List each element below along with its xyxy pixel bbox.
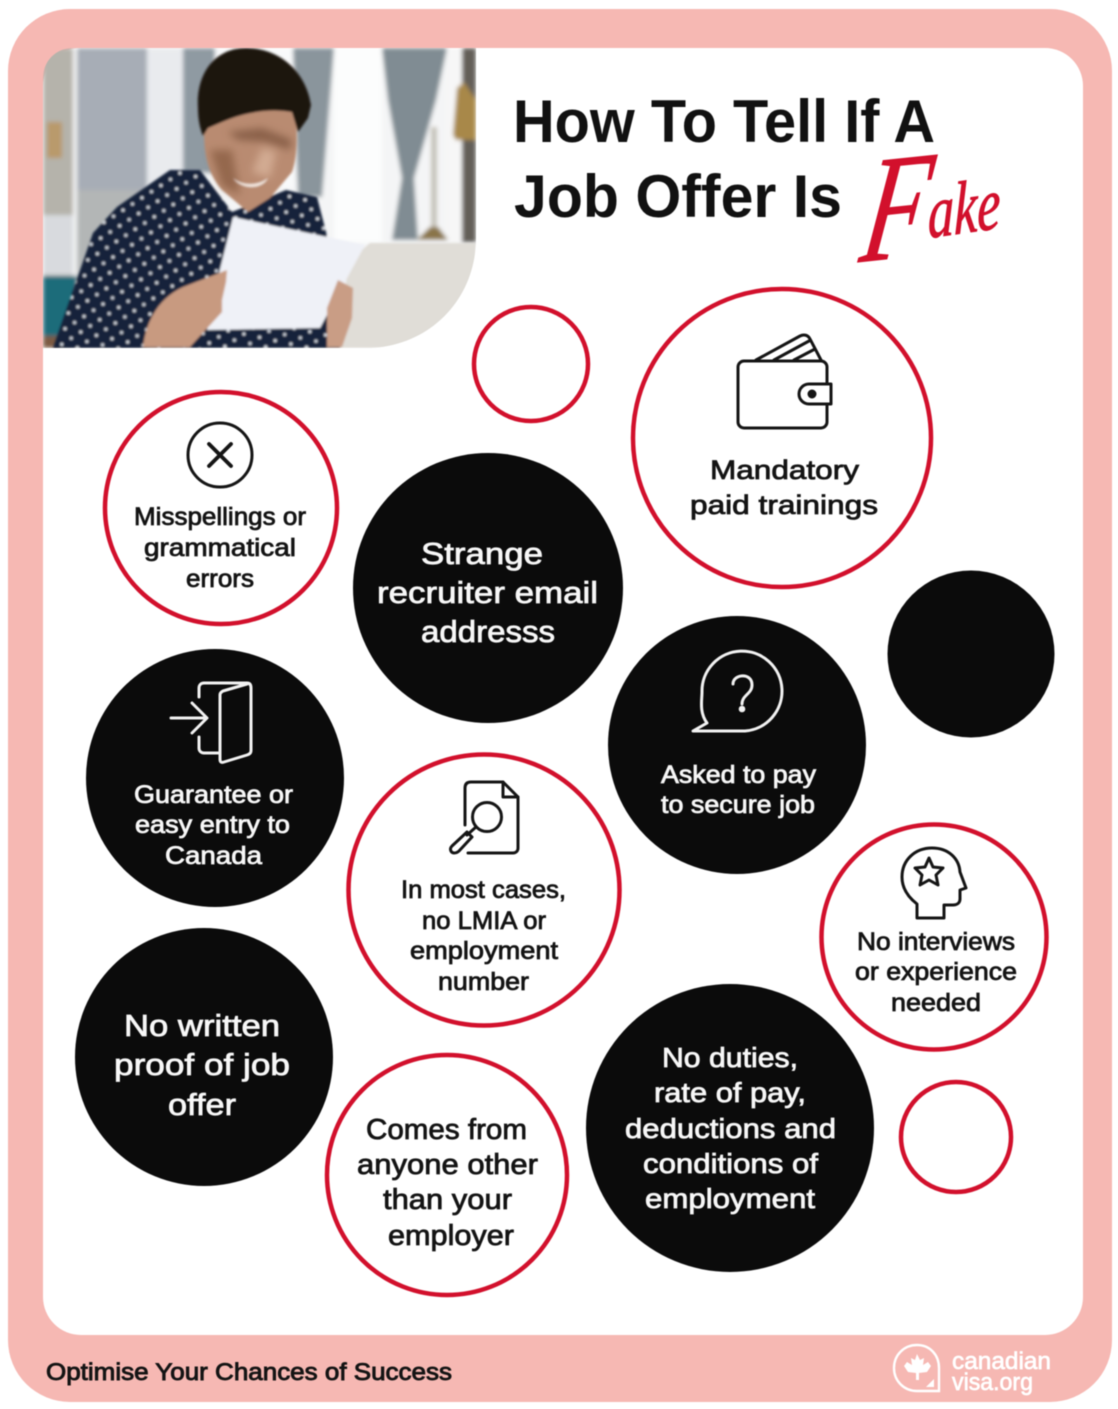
item: No duties, rate of pay, deductions and conditions xyxy=(586,984,874,1272)
item: no LMIA or employment number: employment xyxy=(410,937,558,965)
item: Asked to pay to secure job: Asked to pay xyxy=(661,761,817,789)
title: How To Tell If A xyxy=(513,88,935,155)
icon: document with magnifier xyxy=(451,782,518,853)
item: Misspellings or grammatical errors: errors xyxy=(186,565,254,593)
footer logo: canadianvisa.org: canadian xyxy=(952,1348,1051,1375)
item: No interviews or experience needed: needed xyxy=(891,989,981,1017)
item: Mandatory paid trainings: paid trainings xyxy=(690,490,878,520)
item: No duties, rate of pay, deductions and conditions: rate of pay, xyxy=(654,1077,806,1108)
icon: wallet xyxy=(738,335,831,428)
item: No interviews or experience needed xyxy=(822,824,1046,1050)
item: Strange recruiter email address xyxy=(353,453,623,723)
title accent: Fake: ake xyxy=(928,162,1000,255)
item: No interviews or experience needed: No interviews xyxy=(857,928,1015,956)
item: Comes from anyone other than your employer: Comes from xyxy=(366,1114,527,1146)
title: Job Offer Is xyxy=(514,163,842,230)
item: No written proof of job offer: offer xyxy=(168,1087,236,1122)
item: No duties, rate of pay, deductions and conditions: deductions and xyxy=(625,1113,836,1144)
item: Guarantee or easy entry to Canada: Canada xyxy=(165,842,262,870)
item: Strange recruiter email address: recruiter email xyxy=(377,575,598,610)
item: Misspellings or grammatical errors: Misspellings or xyxy=(134,503,306,531)
icon: door with arrow xyxy=(171,683,251,762)
footer logo: canadianvisa.org: visa.org xyxy=(952,1369,1033,1396)
item: Misspellings or grammatical errors xyxy=(105,392,337,624)
decorative ring: top xyxy=(474,307,588,421)
item: No duties, rate of pay, deductions and conditions: No duties, xyxy=(662,1042,798,1073)
item: Asked to pay to secure job xyxy=(608,616,866,874)
item: no LMIA or employment number: no LMIA or xyxy=(422,907,546,935)
title accent: Fake xyxy=(852,119,1000,296)
item: Comes from anyone other than your employer xyxy=(327,1055,567,1295)
item: No written proof of job offer xyxy=(75,928,333,1186)
icon: maple leaf badge xyxy=(894,1345,939,1391)
photo: woman reading a letter xyxy=(43,48,476,348)
item: Asked to pay to secure job: to secure job xyxy=(661,791,815,819)
item: Mandatory paid trainings xyxy=(633,289,931,587)
item: Misspellings or grammatical errors: grammatical xyxy=(144,534,296,562)
item: Comes from anyone other than your employer: anyone other xyxy=(357,1149,538,1181)
item: Guarantee or easy entry to Canada: Guarantee or xyxy=(134,781,293,809)
item: Strange recruiter email address: addresss xyxy=(421,614,555,649)
item: No written proof of job offer: No written xyxy=(124,1008,280,1043)
item: no LMIA or employment number: In most cases, xyxy=(401,876,566,904)
decorative ring: bottom right xyxy=(901,1082,1011,1192)
title accent: Fake: F xyxy=(852,119,943,296)
item: no LMIA or employment number: number xyxy=(438,968,529,996)
item: Guarantee or easy entry to Canada xyxy=(86,649,344,907)
footer tagline: Optimise Your Chances of Success xyxy=(46,1359,452,1386)
item: Comes from anyone other than your employer: employer xyxy=(388,1220,514,1252)
item: No interviews or experience needed: or experience xyxy=(855,958,1017,986)
item: No written proof of job offer: proof of job xyxy=(114,1047,290,1082)
item: no LMIA or employment number xyxy=(348,754,620,1026)
item: Guarantee or easy entry to Canada: easy entry to xyxy=(135,811,290,839)
footer logo: canadianvisa.org xyxy=(894,1345,1051,1396)
icon: x in circle xyxy=(188,423,252,487)
item: Mandatory paid trainings: Mandatory xyxy=(710,455,860,485)
decorative black circle xyxy=(888,570,1054,738)
item: No duties, rate of pay, deductions and conditions: employment xyxy=(645,1183,815,1214)
item: No duties, rate of pay, deductions and conditions: conditions of xyxy=(643,1148,818,1179)
title xyxy=(513,88,935,230)
item: Comes from anyone other than your employer: than your xyxy=(383,1184,512,1216)
icon: head with star xyxy=(902,848,966,918)
icon: question bubble xyxy=(693,651,782,731)
item: Strange recruiter email address: Strange xyxy=(421,536,543,571)
